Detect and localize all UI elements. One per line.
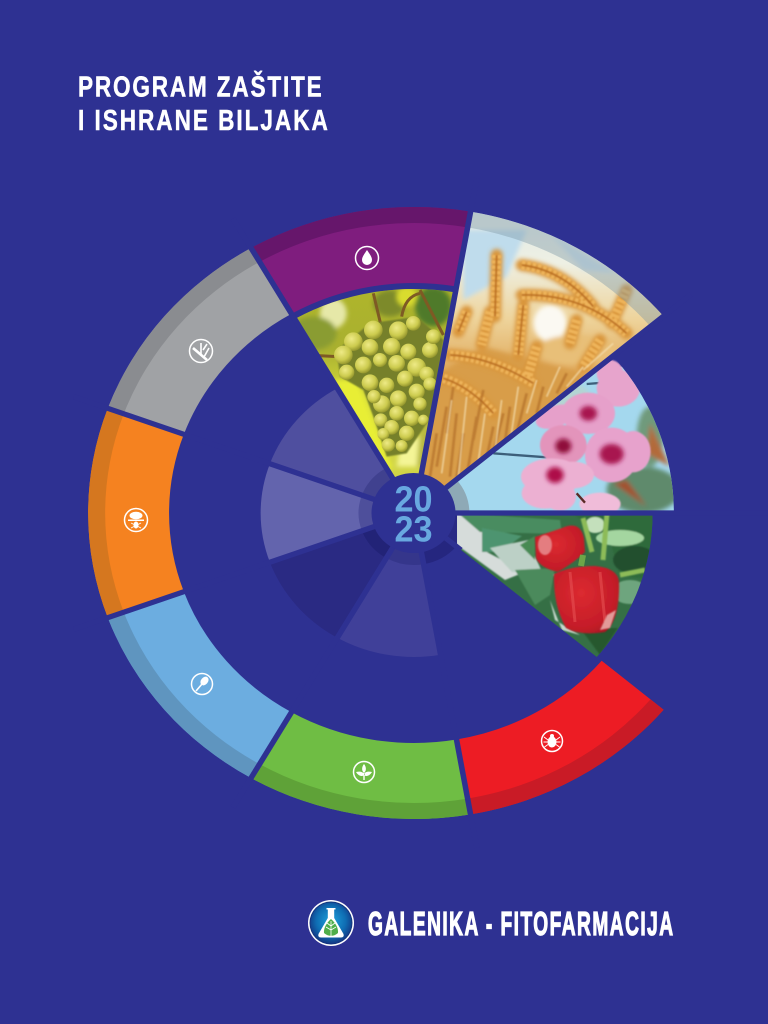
title: I ISHRANE BILJAKA bbox=[78, 103, 330, 137]
separator lines between segments bbox=[74, 178, 768, 848]
photo: wheat bbox=[417, 207, 670, 487]
title: PROGRAM ZAŠTITE bbox=[78, 70, 324, 103]
icon: beetle bbox=[542, 730, 562, 752]
icon: water drop bbox=[356, 246, 378, 270]
hub with year: 23 bbox=[394, 508, 432, 550]
segment: red bbox=[456, 661, 664, 814]
inner wedges bbox=[261, 388, 469, 657]
hub with year bbox=[372, 473, 456, 553]
title bbox=[78, 70, 330, 137]
brand name: GALENIKA - FITOFARMACIJA bbox=[368, 906, 675, 942]
photo: peppers bbox=[457, 516, 652, 657]
segment: light blue bbox=[108, 592, 292, 778]
photo: grapes bbox=[297, 289, 453, 477]
icon: branch bbox=[190, 340, 212, 362]
photo: blossoms bbox=[448, 360, 674, 510]
logo emblem bbox=[308, 900, 354, 946]
outer tinted band of wheat bbox=[468, 212, 664, 327]
icon: plant bbox=[354, 762, 374, 782]
icon: rodent and mite bbox=[124, 508, 148, 532]
segment: gray bbox=[108, 248, 292, 434]
hub with year: 20 bbox=[394, 478, 432, 520]
hub-shaded arc of blossoms bbox=[448, 482, 470, 510]
icon: seed sprout bbox=[192, 674, 212, 694]
segment: purple bbox=[251, 207, 471, 314]
outer ring of coloured segments bbox=[88, 207, 664, 819]
segment: green bbox=[251, 712, 471, 819]
segment: orange bbox=[88, 408, 184, 618]
